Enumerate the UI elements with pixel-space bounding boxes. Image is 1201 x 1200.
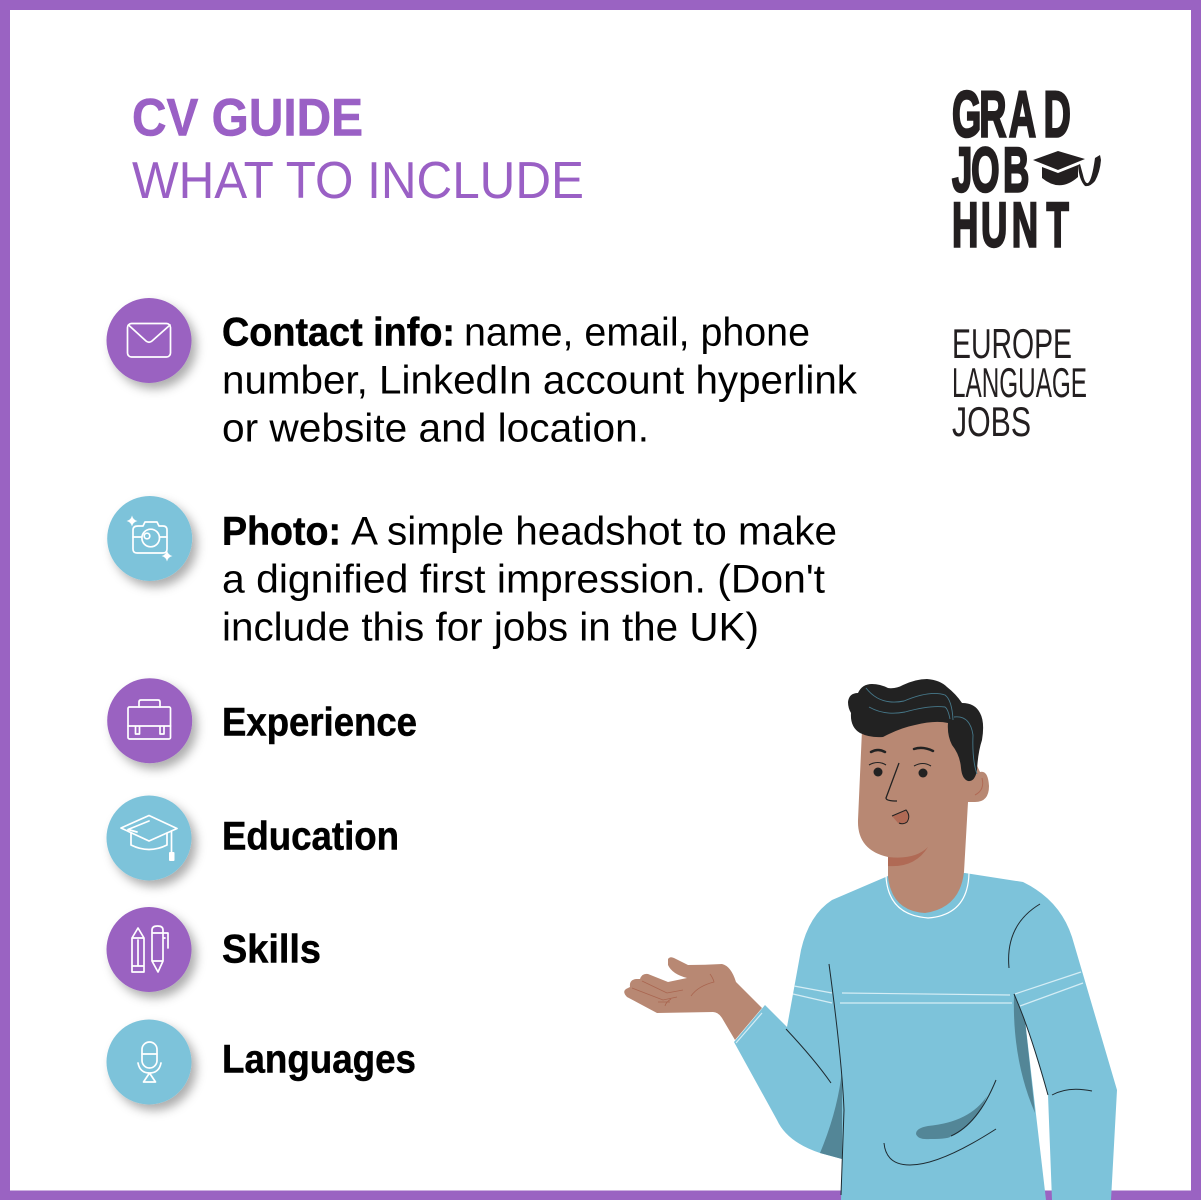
sweater (734, 873, 1117, 1200)
logo: Europe Language Jobs: LANGUAGE (952, 359, 1087, 406)
icon: graduation cap (1033, 151, 1101, 186)
icon: experience briefcase (107, 678, 192, 763)
text: experience: Experience (222, 700, 417, 744)
title: CV GUIDE (132, 88, 363, 148)
text: education: Education (222, 814, 399, 858)
text: contact info: number, LinkedIn account hyperlink (222, 358, 857, 402)
text: contact info: or website and location. (222, 406, 649, 450)
title (132, 88, 584, 210)
logo: Grad Job Hunt: GRAD (952, 79, 1071, 151)
text: photo: include this for jobs in the UK) (222, 606, 759, 650)
face features (869, 748, 933, 824)
icon: contact envelope (106, 298, 192, 383)
logo: Europe Language Jobs: EUROPE (952, 320, 1072, 367)
text: contact info: name, email, phone (464, 310, 810, 354)
hair (848, 679, 983, 781)
title: WHAT TO INCLUDE (132, 152, 584, 210)
text: contact info (222, 310, 857, 450)
logo: Europe Language Jobs (952, 320, 1087, 445)
sleeve and torso shadows (820, 1070, 842, 1159)
logo: Grad Job Hunt: JOB (952, 134, 1029, 205)
hand and forearm (624, 957, 762, 1040)
icon: education cap (106, 796, 192, 880)
text: skills: Skills (222, 928, 321, 972)
icon: photo camera (107, 496, 192, 581)
illustration: man presenting (624, 679, 1117, 1200)
text: photo: Photo: (222, 510, 341, 554)
text: contact info: Contact info: (222, 310, 455, 354)
logo: Grad Job Hunt: HUNT (952, 189, 1069, 260)
text: photo (222, 510, 837, 650)
collar and sweater bands (886, 873, 969, 918)
sweater fold lines (786, 904, 1092, 1195)
icon: skills pencil and pen (106, 907, 192, 992)
text: photo: A simple headshot to make (351, 510, 837, 554)
icon: languages microphone (106, 1020, 192, 1104)
text: languages: Languages (222, 1038, 416, 1082)
logo: Grad Job Hunt (952, 79, 1101, 260)
text: photo: a dignified first impression. (Don't (222, 558, 825, 602)
logo: Europe Language Jobs: JOBS (952, 398, 1031, 445)
head and neck (848, 679, 989, 913)
